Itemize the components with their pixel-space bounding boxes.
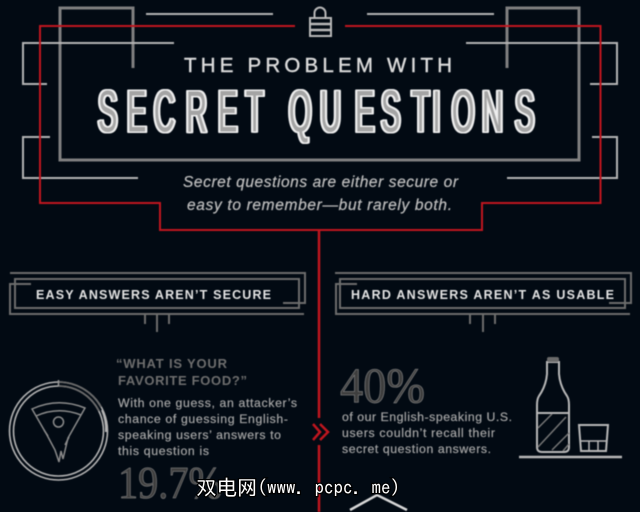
title line: the problem with: THE PROBLEM WITH	[184, 54, 452, 77]
header frame: white corner brackets and top rules	[23, 14, 617, 178]
heading panel: hard answers: HARD ANSWERS AREN’T AS USABLE	[351, 288, 614, 302]
header frame: gray inner frame	[60, 8, 579, 160]
text block: hard answers explanation: users couldn’t recall their	[342, 426, 495, 440]
icon: diamond, partly cropped	[350, 495, 407, 510]
text block: easy answers explanation: chance of guessing English-	[118, 412, 288, 426]
watermark: 双电网	[196, 477, 258, 498]
text block: easy answers explanation: With one guess, an attacker’s	[118, 396, 297, 410]
stat: 40 percent: 40%	[340, 357, 425, 413]
icon: red double chevron	[313, 424, 328, 440]
callout: favorite food question: “WHAT IS YOUR	[116, 356, 228, 371]
heading panel: hard answers	[335, 273, 631, 332]
watermark: （www. pcpc. me）	[248, 477, 410, 497]
callout: favorite food question: FAVORITE FOOD?”	[118, 373, 247, 388]
watermark	[196, 477, 410, 498]
text block: easy answers explanation: speaking users’ answers to	[118, 428, 281, 442]
text block: hard answers explanation: secret question answers.	[342, 442, 491, 456]
heading panel: easy answers	[10, 273, 305, 332]
title: secret questions: SECRET QUESTIONS	[100, 78, 536, 144]
callout: favorite food question	[116, 356, 247, 388]
red vertical timeline	[318, 230, 320, 512]
red circuit line around the header	[40, 26, 600, 230]
text block: hard answers explanation: of our English-speaking U.S.	[342, 410, 512, 424]
title: secret questions: SECRET QUESTIONS	[98, 78, 534, 144]
icon: bottle and glass on a shelf	[519, 357, 622, 457]
stat: 19.7 percent: 19.7%	[118, 458, 222, 508]
icon: padlock	[310, 8, 331, 36]
heading panel: easy answers: EASY ANSWERS AREN’T SECURE	[36, 288, 271, 302]
text block: easy answers explanation: this question is	[118, 444, 209, 458]
subtitle: easy to remember—but rarely both.	[187, 197, 452, 214]
title: secret questions: SECRET QUESTIONS	[98, 78, 534, 144]
icon: pizza in a ring	[10, 380, 108, 480]
text block: hard answers explanation	[342, 410, 512, 456]
subtitle: Secret questions are either secure or	[183, 174, 459, 191]
title: secret questions: SECRET QUESTIONS	[97, 78, 533, 144]
text block: easy answers explanation	[118, 396, 297, 458]
subtitle	[183, 174, 459, 214]
